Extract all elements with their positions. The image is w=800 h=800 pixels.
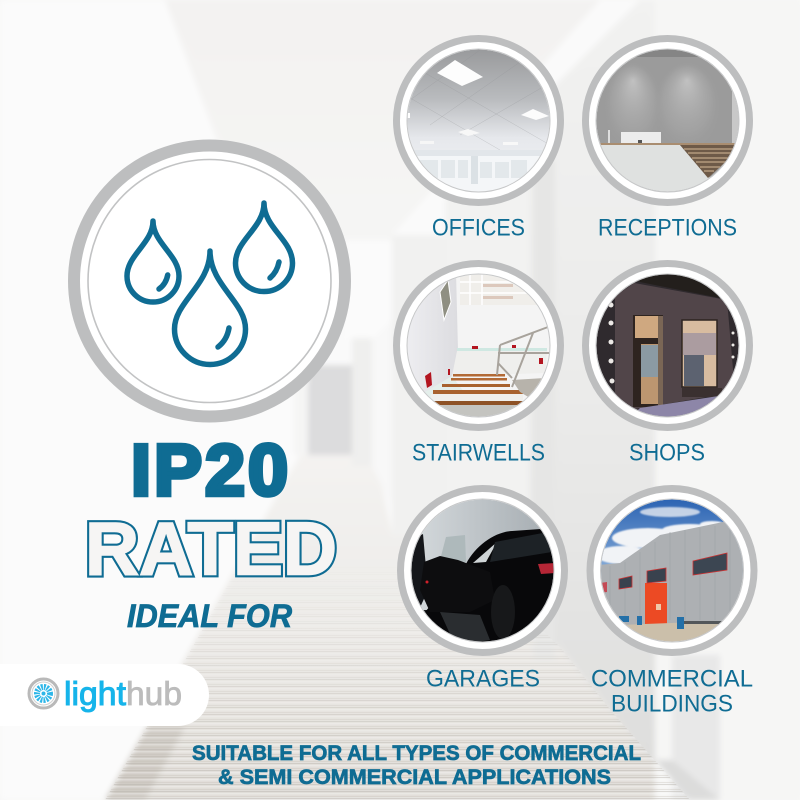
background: blurred corridor photo bbox=[106, 157, 720, 800]
panel: commercial buildings bbox=[590, 488, 754, 718]
footer text: suitable applications: SUITABLE FOR ALL TYPES OF COMMERCIAL bbox=[192, 742, 641, 765]
subheading: IDEAL FOR: IDEAL FOR bbox=[127, 598, 292, 634]
logo panel: lighthub bbox=[0, 664, 209, 726]
label: garages: GARAGES bbox=[426, 666, 540, 692]
photo: reception desk bbox=[595, 48, 742, 193]
label: offices: OFFICES bbox=[432, 214, 525, 242]
label: shops: SHOPS bbox=[629, 440, 705, 466]
photo: industrial building bbox=[601, 500, 743, 642]
heading: RATED outlined: RATED bbox=[85, 506, 337, 590]
panel: stairwells bbox=[396, 264, 560, 466]
logo panel: lighthub: hub bbox=[126, 675, 182, 712]
panel: receptions bbox=[586, 38, 750, 242]
icon: three water drops in ring bbox=[74, 146, 345, 416]
logo panel: lighthub: light bbox=[64, 675, 126, 712]
label: commercial buildings: BUILDINGS bbox=[611, 690, 733, 718]
panel: shops bbox=[586, 264, 750, 466]
photo: black car bbox=[410, 498, 556, 645]
photo: office ceiling bbox=[405, 48, 555, 193]
label: stairwells: STAIRWELLS bbox=[412, 440, 545, 466]
photo: shop front bbox=[595, 272, 740, 422]
footer text: suitable applications: & SEMI COMMERCIAL APPLICATIONS bbox=[218, 766, 611, 789]
photo: stairwell bbox=[408, 274, 550, 416]
label: commercial buildings bbox=[591, 666, 753, 718]
panel: offices bbox=[396, 38, 560, 242]
panel: garages bbox=[400, 488, 564, 692]
heading: IP20: IP20 bbox=[131, 431, 288, 511]
heading: RATED outlined: RATED bbox=[85, 506, 337, 590]
label: receptions: RECEPTIONS bbox=[598, 214, 737, 242]
footer text: suitable applications bbox=[192, 742, 641, 789]
label: commercial buildings: COMMERCIAL bbox=[591, 666, 753, 692]
